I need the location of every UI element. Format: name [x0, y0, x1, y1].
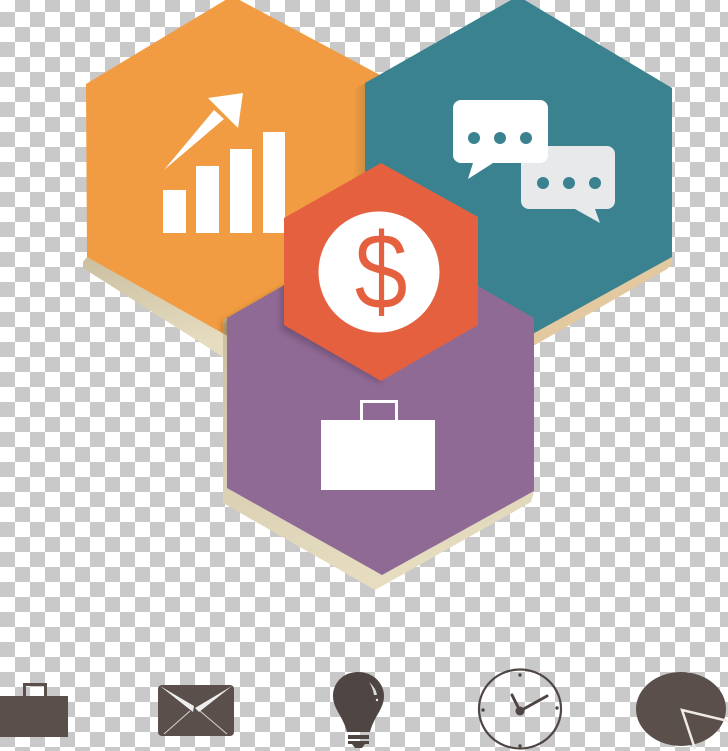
icon: white briefcase	[321, 402, 435, 490]
panel: red dollar hexagon	[281, 163, 478, 384]
icon: brown briefcase	[0, 684, 68, 737]
icon: bar chart with rising arrow	[163, 93, 285, 233]
icon: brown clock	[479, 670, 561, 748]
icon: dollar coin	[318, 210, 440, 332]
panel: purple briefcase hexagon	[219, 284, 534, 590]
panel: teal chat hexagon	[365, 0, 672, 345]
icon: dollar coin: $	[354, 210, 408, 332]
icon: brown pie chart	[636, 672, 728, 749]
icon: brown envelope	[158, 685, 234, 736]
icon: brown light bulb	[333, 672, 384, 748]
panel: orange growth hexagon	[83, 0, 380, 358]
icon: chat bubbles	[453, 100, 615, 223]
